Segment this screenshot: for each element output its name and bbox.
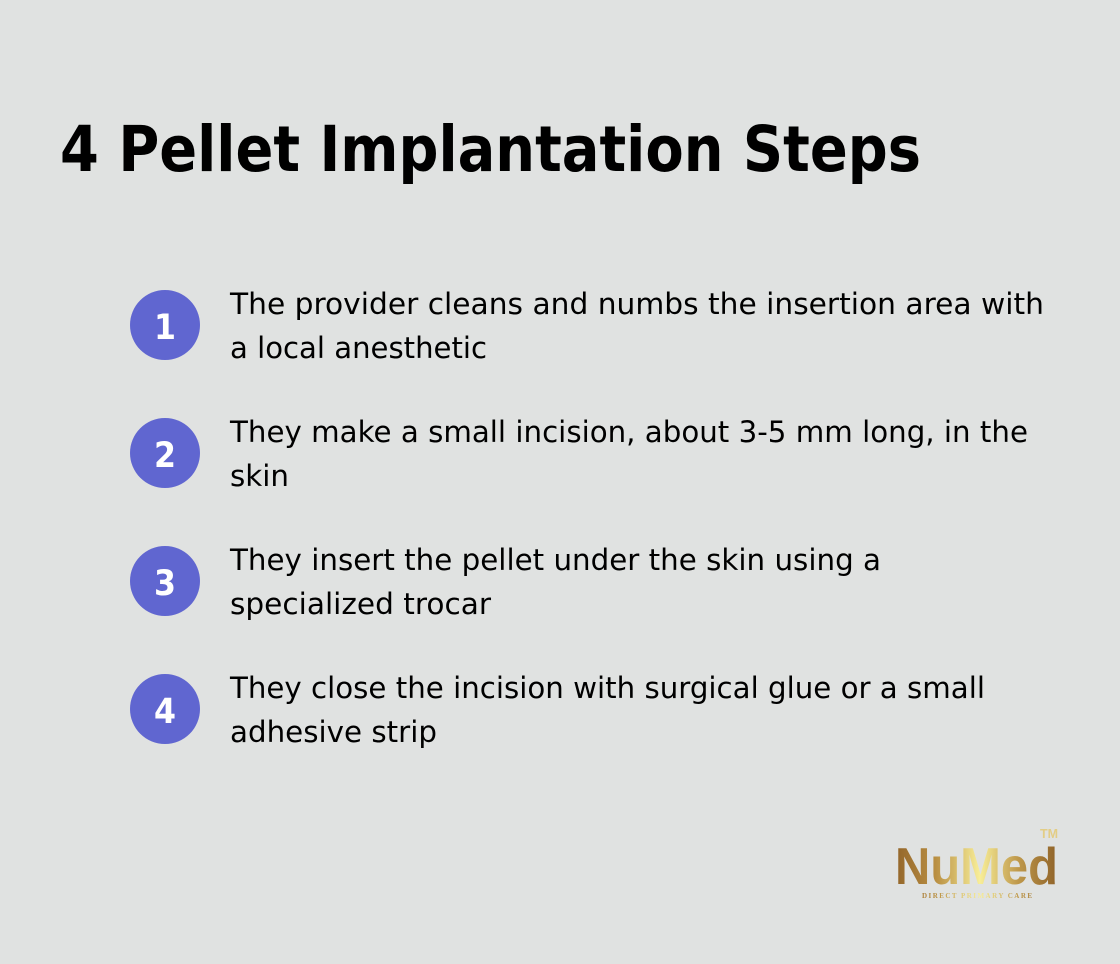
step 3	[130, 543, 881, 621]
logo wordmark: NuMed	[895, 838, 1058, 896]
logo tagline: DIRECT PRIMARY CARE	[922, 892, 1032, 900]
step 4 text	[229, 671, 985, 749]
step 2 badge	[130, 418, 200, 488]
step 1 text	[229, 287, 1044, 365]
step 4 badge: 4	[154, 692, 176, 732]
step 1 badge	[130, 290, 200, 360]
step 3 badge	[130, 546, 200, 616]
step 4	[130, 671, 985, 749]
step 4 text: They close the incision with surgical glue or a small	[229, 671, 985, 705]
logo: NuMed	[895, 826, 1058, 900]
step 1 text: a local anesthetic	[230, 331, 487, 365]
step 2 badge: 2	[154, 436, 176, 476]
step 3 text: specialized trocar	[230, 587, 491, 621]
step 1 badge: 1	[154, 308, 176, 348]
step 1 text: The provider cleans and numbs the insertion area with	[229, 287, 1044, 321]
logo trademark: TM	[1040, 826, 1058, 841]
step 3 text: They insert the pellet under the skin using a	[229, 543, 881, 577]
step 4 text: adhesive strip	[230, 715, 437, 749]
step 2 text: skin	[230, 459, 289, 493]
step 2 text: They make a small incision, about 3-5 mm long, in the	[229, 415, 1028, 449]
title: 4 Pellet Implantation Steps	[60, 113, 921, 186]
step 4 badge	[130, 674, 200, 744]
step 3 text	[229, 543, 881, 621]
step 3 badge: 3	[154, 564, 176, 604]
step 2	[130, 415, 1028, 493]
step 2 text	[229, 415, 1028, 493]
step 1	[130, 287, 1044, 365]
